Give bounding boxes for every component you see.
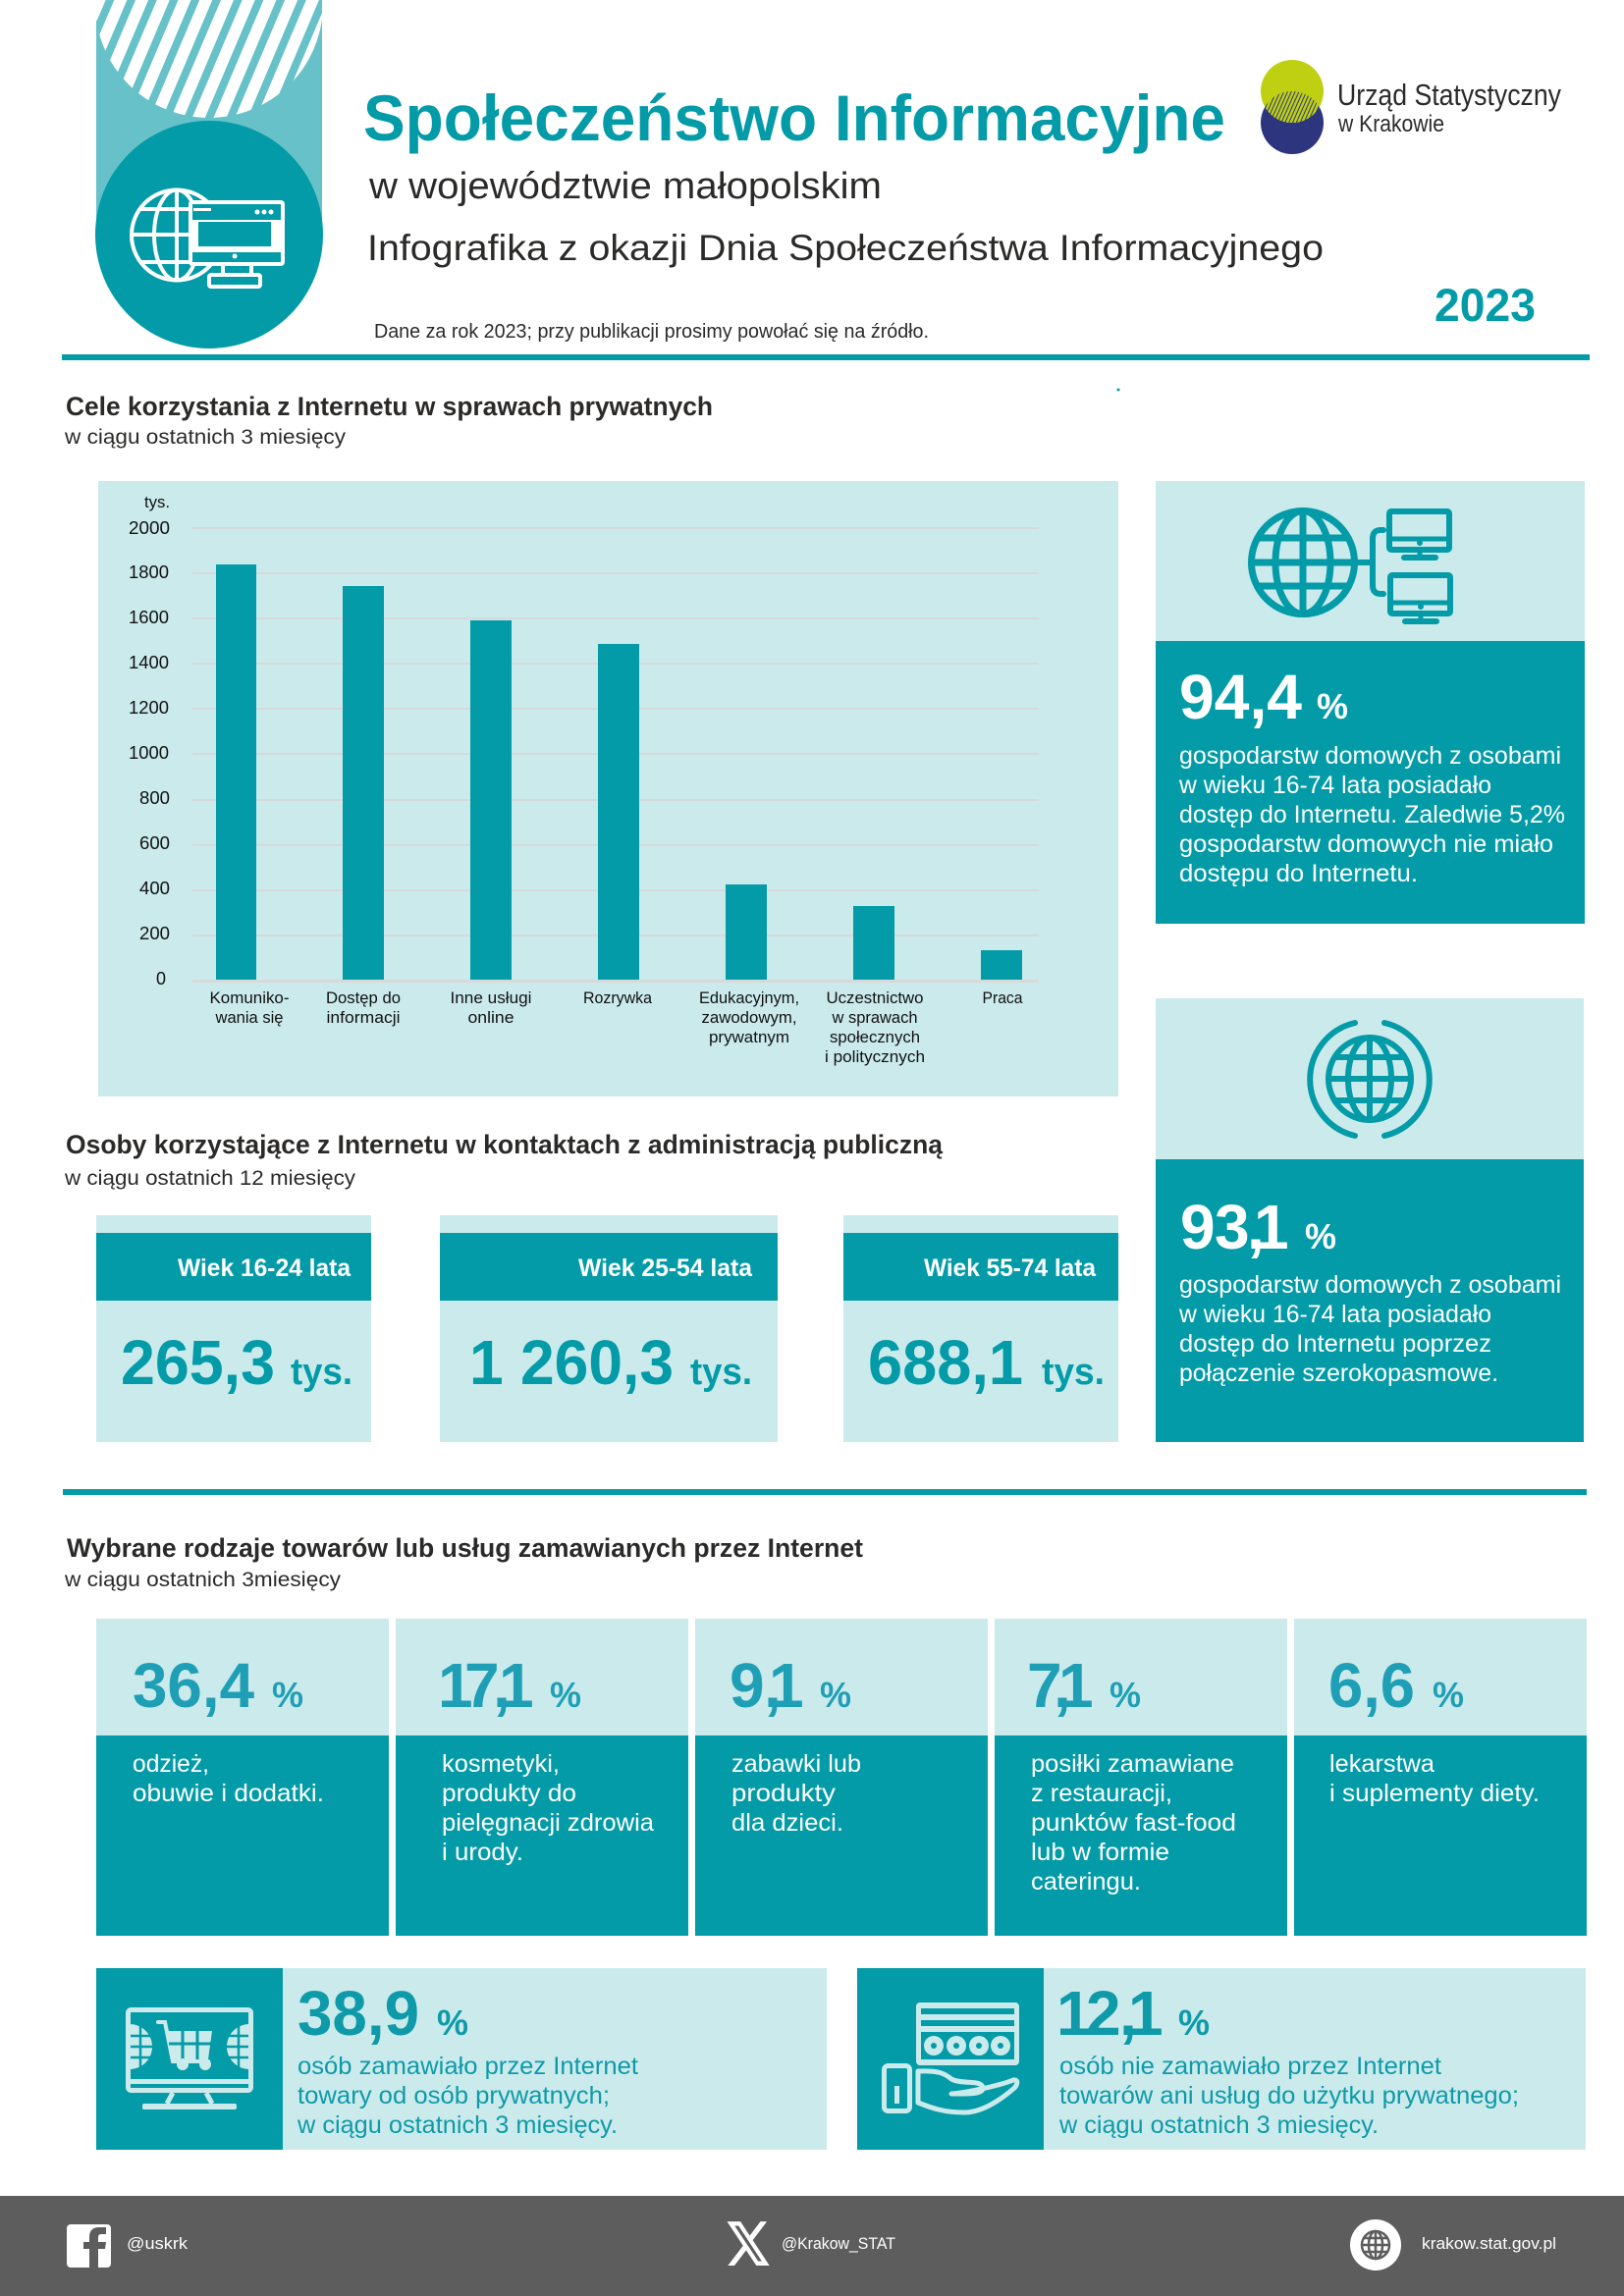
description: gospodarstw domowych nie miało xyxy=(1179,830,1553,858)
tile: medicines 6,6% xyxy=(1294,1619,1587,1936)
tile: cosmetics 17,1%: i urody. xyxy=(442,1839,523,1866)
tile: cosmetics 17,1%: 17,1 xyxy=(438,1650,534,1721)
category labels: informacji xyxy=(326,1008,401,1027)
description: w wieku 16-74 lata posiadało xyxy=(1178,772,1491,799)
footer xyxy=(0,2196,1624,2296)
card: 12,1% did not order: osób nie zamawiało przez Internet xyxy=(1059,2053,1441,2080)
icon: globe with arcs xyxy=(1310,1023,1430,1136)
card: 38,9% ordered from private persons: towary od osób prywatnych; xyxy=(298,2082,610,2109)
category labels: Edukacyjnym, xyxy=(699,988,799,1007)
tile: toys 9,1% xyxy=(695,1619,988,1936)
card: 12,1% did not order: w ciągu ostatnich 3 miesięcy. xyxy=(1058,2111,1379,2139)
tile: clothing 36,4% xyxy=(96,1619,389,1936)
panel: 94,4% households xyxy=(1156,481,1585,924)
y axis labels: tys. xyxy=(144,493,170,511)
description: w wieku 16-74 lata posiadało xyxy=(1178,1301,1491,1328)
tile: age 25-54: Wiek 25-54 lata xyxy=(578,1255,753,1282)
value: % xyxy=(1305,1216,1336,1256)
logo: Urząd Statystyczny w Krakowie xyxy=(1261,60,1561,154)
card: 38,9% ordered from private persons xyxy=(96,1968,827,2150)
value: 94,4 xyxy=(1179,662,1302,732)
icon: facebook xyxy=(67,2224,111,2268)
tile: clothing 36,4%: odzież, xyxy=(133,1750,209,1778)
tile: clothing 36,4%: % xyxy=(272,1675,303,1715)
tile: toys 9,1%: dla dzieci. xyxy=(731,1809,843,1837)
tile: medicines 6,6%: lekarstwa xyxy=(1329,1750,1435,1778)
logo: Urząd Statystyczny w Krakowie: w Krakowie xyxy=(1337,111,1444,137)
y axis labels: 200 xyxy=(139,924,170,943)
y axis labels: 0 xyxy=(156,969,166,988)
bar chart xyxy=(98,481,1118,1096)
category labels: Dostęp do xyxy=(326,988,401,1007)
tile: meals 7,1%: punktów fast-food xyxy=(1031,1809,1236,1837)
tile: age 25-54 xyxy=(440,1215,778,1442)
y axis labels: 1600 xyxy=(129,608,169,627)
category labels: prywatnym xyxy=(709,1028,789,1046)
y axis labels: 1000 xyxy=(129,743,169,763)
tile: medicines 6,6%: i suplementy diety. xyxy=(1329,1780,1540,1807)
tile: meals 7,1% xyxy=(995,1619,1287,1936)
category labels: online xyxy=(467,1008,514,1027)
heading: goods and services ordered: Wybrane rodzaje towarów lub usług zamawianych przez Internet xyxy=(67,1533,863,1563)
card: 12,1% did not order: % xyxy=(1178,2002,1210,2043)
card: 12,1% did not order: 12,1 xyxy=(1056,1978,1164,2049)
header emblem xyxy=(95,0,323,348)
category labels: wania się xyxy=(215,1008,283,1027)
y axis labels: 1800 xyxy=(129,562,169,582)
tile: age 55-74 xyxy=(843,1215,1118,1442)
tile: age 55-74: tys. xyxy=(1042,1352,1105,1393)
category labels: w sprawach xyxy=(832,1008,917,1027)
year: 2023 xyxy=(1435,279,1536,331)
facebook handle: @uskrk xyxy=(127,2234,189,2253)
value: 93,1 xyxy=(1180,1192,1289,1262)
category labels: Praca xyxy=(982,988,1023,1007)
tile: age 16-24: tys. xyxy=(291,1352,352,1393)
category labels: społecznych xyxy=(830,1028,920,1046)
tile: cosmetics 17,1%: % xyxy=(550,1675,581,1715)
description: dostęp do Internetu. Zaledwie 5,2% xyxy=(1179,801,1565,828)
tile: age 16-24 xyxy=(96,1215,371,1442)
description: dostępu do Internetu. xyxy=(1179,860,1418,887)
card: 12,1% did not order xyxy=(857,1968,1586,2150)
tile: toys 9,1%: produkty xyxy=(731,1780,837,1807)
icon: hand holding card xyxy=(884,2002,1019,2112)
tile: meals 7,1%: lub w formie xyxy=(1031,1839,1169,1866)
heading: public administration: Osoby korzystające z Internetu w kontaktach z administracją publiczną xyxy=(66,1130,944,1159)
tile: medicines 6,6%: % xyxy=(1433,1675,1464,1715)
heading: internet use purposes: Cele korzystania z Internetu w sprawach prywatnych xyxy=(66,392,713,421)
tile: cosmetics 17,1%: kosmetyki, xyxy=(442,1750,560,1778)
icon: X xyxy=(728,2221,770,2266)
y axis labels: 600 xyxy=(139,833,170,853)
tile: age 25-54: 1 260,3 xyxy=(469,1327,674,1398)
y axis labels: 1400 xyxy=(129,653,169,672)
logo: Urząd Statystyczny w Krakowie: Urząd Statystyczny xyxy=(1337,78,1561,112)
tile: medicines 6,6%: 6,6 xyxy=(1328,1650,1415,1721)
heading: public administration: w ciągu ostatnich 12 miesięcy xyxy=(64,1167,356,1190)
y axis labels: 400 xyxy=(139,879,170,898)
card: 38,9% ordered from private persons: w ciągu ostatnich 3 miesięcy. xyxy=(297,2111,618,2139)
card: 38,9% ordered from private persons: osób zamawiało przez Internet xyxy=(298,2053,638,2080)
y axis labels xyxy=(129,493,170,988)
tile: toys 9,1%: 9,1 xyxy=(730,1650,804,1721)
icon: globe and monitor xyxy=(132,189,285,287)
tile: cosmetics 17,1%: produkty do xyxy=(442,1780,576,1807)
category labels: Uczestnictwo xyxy=(827,988,923,1007)
X handle: @Krakow_STAT xyxy=(782,2234,895,2253)
card: 12,1% did not order: towarów ani usług do użytku prywatnego; xyxy=(1059,2082,1519,2109)
tile: age 25-54: tys. xyxy=(690,1352,752,1393)
category labels: i politycznych xyxy=(825,1047,925,1066)
description: gospodarstw domowych z osobami xyxy=(1179,742,1561,770)
description xyxy=(1178,1271,1561,1387)
tile: toys 9,1%: % xyxy=(820,1675,851,1715)
y axis labels: 1200 xyxy=(129,698,169,718)
heading: internet use purposes xyxy=(64,392,713,449)
tile: age 16-24: 265,3 xyxy=(121,1327,275,1398)
value: % xyxy=(1317,686,1348,726)
tile: meals 7,1%: 7,1 xyxy=(1027,1650,1094,1721)
tile: clothing 36,4%: 36,4 xyxy=(133,1650,254,1721)
y axis labels: 2000 xyxy=(129,518,170,538)
heading: internet use purposes: w ciągu ostatnich 3 miesięcy xyxy=(64,426,347,449)
heading: goods and services ordered: w ciągu ostatnich 3miesięcy xyxy=(64,1569,342,1591)
subtitle: occasion: Infografika z okazji Dnia Społeczeństwa Informacyjnego xyxy=(367,228,1324,268)
tile: meals 7,1%: % xyxy=(1110,1675,1141,1715)
description: połączenie szerokopasmowe. xyxy=(1179,1360,1498,1387)
tile: age 55-74: Wiek 55-74 lata xyxy=(924,1255,1097,1282)
icon: monitor with shopping cart xyxy=(126,2007,253,2109)
tile: meals 7,1%: posiłki zamawiane xyxy=(1031,1750,1234,1778)
icon: website globe xyxy=(1350,2219,1401,2270)
subtitle: region: w województwie małopolskim xyxy=(368,166,882,207)
icon: globe connected to monitors xyxy=(1251,510,1450,621)
tile: clothing 36,4%: obuwie i dodatki. xyxy=(133,1780,324,1807)
description: gospodarstw domowych z osobami xyxy=(1179,1271,1561,1299)
website address: krakow.stat.gov.pl xyxy=(1422,2234,1556,2253)
panel: 93,1% broadband xyxy=(1156,998,1584,1442)
category labels: zawodowym, xyxy=(701,1008,797,1027)
title: Społeczeństwo Informacyjne xyxy=(363,81,1225,154)
heading: goods and services ordered xyxy=(64,1533,863,1591)
tile: meals 7,1%: cateringu. xyxy=(1031,1868,1141,1896)
card: 38,9% ordered from private persons: % xyxy=(437,2002,468,2043)
category labels: Komuniko- xyxy=(210,988,289,1007)
tile: age 55-74: 688,1 xyxy=(868,1327,1023,1398)
tile: meals 7,1%: z restauracji, xyxy=(1031,1780,1172,1807)
description: dostęp do Internetu poprzez xyxy=(1179,1330,1491,1358)
heading: public administration xyxy=(64,1130,944,1190)
y axis labels: 800 xyxy=(139,788,170,808)
category labels: Inne usługi xyxy=(450,988,532,1007)
tile: cosmetics 17,1% xyxy=(396,1619,688,1936)
category labels xyxy=(210,988,1023,1066)
value xyxy=(1180,1192,1336,1262)
category labels: Rozrywka xyxy=(583,988,653,1007)
source note: Dane za rok 2023; przy publikacji prosimy powołać się na źródło. xyxy=(374,321,929,343)
tile: toys 9,1%: zabawki lub xyxy=(731,1750,861,1778)
tile: cosmetics 17,1%: pielęgnacji zdrowia xyxy=(442,1809,654,1837)
description xyxy=(1178,742,1565,887)
bars xyxy=(216,564,1022,980)
card: 38,9% ordered from private persons: 38,9 xyxy=(298,1978,419,2049)
tile: age 16-24: Wiek 16-24 lata xyxy=(178,1255,352,1282)
